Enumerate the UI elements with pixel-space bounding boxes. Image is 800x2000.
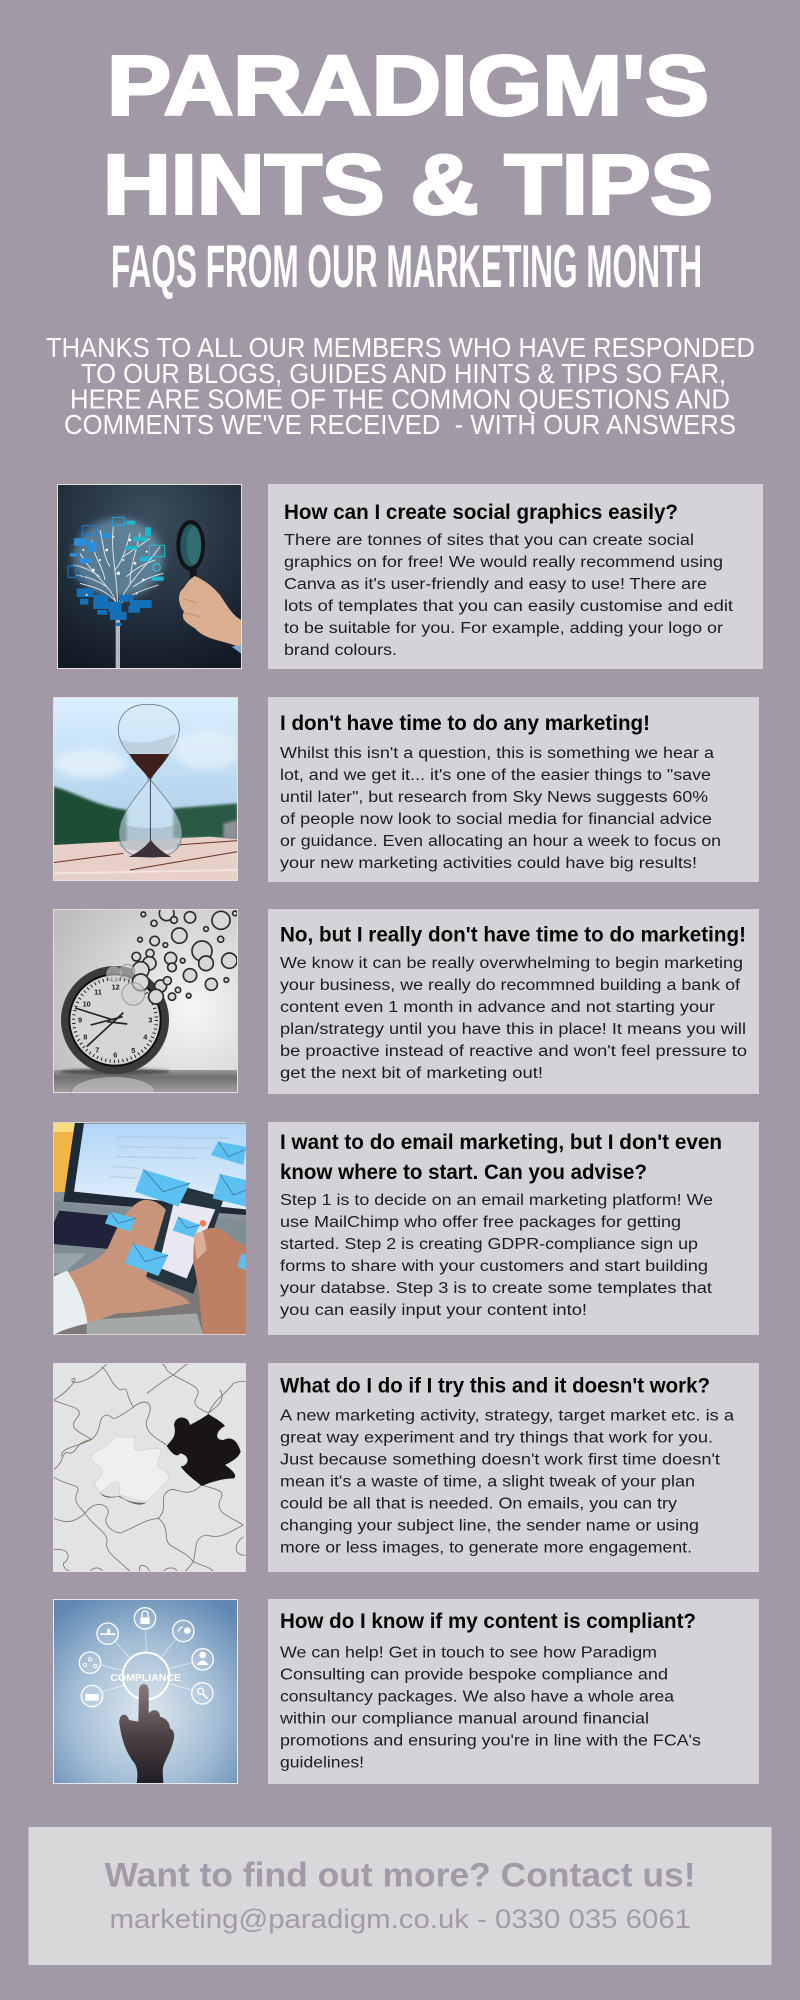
intro text: COMMENTS WE'VE RECEIVED - WITH OUR ANSWERS [64,409,736,440]
answer text: A new marketing activity, strategy, target market etc. is a [280,1408,734,1424]
answer text: until later", but research from Sky News suggests 60% [280,789,708,806]
answer text [280,1192,713,1319]
heading: What do I do if I try this and it doesn't work? [280,1374,710,1398]
heading [280,1131,722,1184]
panel: I don't have time to do any marketing! [268,697,759,882]
image: clock dissolving into small clocks: 5 [131,1046,135,1055]
panel: How can I create social graphics easily? [268,484,763,669]
answer text: brand colours. [284,642,397,659]
image: hand pointing at compliance diagram [53,1599,238,1784]
image: tree of data icons and magnifying glass [57,484,242,669]
image: hourglass [53,697,240,882]
answer text: be proactive instead of reactive and won't feel pressure to [280,1043,747,1060]
image: clock dissolving into small clocks: 4 [143,1033,148,1042]
intro text: HERE ARE SOME OF THE COMMON QUESTIONS AND [70,384,730,414]
image: clock dissolving into small clocks: 6 [113,1051,117,1060]
panel: I want to do email marketing, but I don't even know where to start [268,1122,759,1335]
answer text: We can help! Get in touch to see how Paradigm [280,1644,657,1662]
panel: How do I know if my content is compliant? [268,1599,759,1784]
image: clock dissolving into small clocks: 10 [83,999,91,1008]
answer text: more or less images, to generate more engagement. [280,1540,692,1556]
answer text: or guidance. Even allocating an hour a week to focus on [280,833,721,850]
answer text: get the next bit of marketing out! [280,1065,543,1082]
answer text: lots of templates that you can easily customise and edit [284,598,734,615]
answer text: to be suitable for you. For example, adding your logo or [284,620,723,637]
heading: know where to start. Can you advise? [280,1161,647,1184]
panel: No, but I really don't have time to do marketing! [268,909,759,1094]
image: clock dissolving into small clocks: 3 [148,1016,152,1025]
magnifying glass [190,568,197,580]
answer text: There are tonnes of sites that you can create social [284,532,694,549]
heading: I want to do email marketing, but I don't even [280,1131,722,1154]
title: Paradigm's Hints & Tips: PARADIGM'S [107,38,709,132]
answer text: consultancy packages. We also have a whole area [280,1688,674,1706]
answer text: changing your subject line, the sender name or using [280,1518,699,1534]
intro text [46,332,755,440]
intro text: THANKS TO ALL OUR MEMBERS WHO HAVE RESPONDED [46,332,755,363]
image: clock dissolving into small clocks: 8 [83,1033,87,1042]
image: laptop and phone with email envelopes [53,1122,246,1335]
answer text: of people now look to social media for financial advice [280,811,712,828]
title: Paradigm's Hints & Tips: HINTS & TIPS [103,138,713,232]
answer text: Consulting can provide bespoke compliance and [280,1666,668,1684]
answer text: lot, and we get it... it's one of the easier things to "save [280,767,711,784]
answer text: plan/strategy until you have this in place! It means you will [280,1021,746,1038]
heading: I don't have time to do any marketing! [280,712,650,735]
heading: How do I know if my content is compliant? [280,1610,696,1633]
answer text: promotions and ensuring you're in line with the FCA's [280,1732,701,1750]
intro text: TO OUR BLOGS, GUIDES AND HINTS & TIPS SO FAR, [81,358,726,389]
answer text: you can easily input your content into! [280,1302,587,1319]
contact heading: Want to find out more? Contact us! [104,1856,696,1894]
answer text: great way experiment and try things that work for you. [280,1430,713,1446]
answer text: your databse. Step 3 is to create some templates that [280,1280,713,1297]
answer text: guidelines! [280,1754,364,1772]
image: clock dissolving into small clocks: 9 [78,1016,82,1025]
image: clock dissolving into small clocks: 12 [112,982,120,991]
contact details: marketing@paradigm.co.uk - 0330 035 6061 [110,1904,691,1934]
panel: What do I do if I try this and it doesn't work? [268,1363,759,1572]
answer text: Step 1 is to decide on an email marketing platform! We [280,1192,713,1209]
answer text: We know it can be really overwhelming to begin marketing [280,955,743,972]
panel: contact footer [28,1827,772,1965]
answer text: started. Step 2 is creating GDPR-compliance sign up [280,1236,698,1253]
answer text: your business, we really do recommned building a bank of [280,977,741,994]
answer text: within our compliance manual around financial [279,1710,649,1728]
answer text: Whilst this isn't a question, this is something we hear a [280,745,714,762]
answer text [280,955,747,1082]
answer text: your new marketing activities could have big results! [280,855,697,872]
image: clock dissolving into small clocks: 11 [94,987,102,996]
answer text: Canva as it's user-friendly and easy to use! There are [284,576,707,593]
answer text [280,1408,734,1556]
heading: No, but I really don't have time to do marketing! [280,924,746,946]
answer text [279,1644,701,1772]
image: clock dissolving into small clocks: 7 [95,1046,99,1055]
answer text: could be all that is needed. On emails, you can try [280,1496,677,1512]
title: Paradigm's Hints & Tips [103,38,713,232]
answer text: forms to share with your customers and start building [280,1258,708,1275]
heading: How can I create social graphics easily? [284,501,678,524]
answer text: graphics on for free! We would really recommend using [284,554,723,571]
image: clock dissolving into small clocks [53,906,238,1107]
answer text [284,532,734,659]
label: COMPLIANCE: COMPLIANCE [110,1673,182,1684]
answer text [280,745,721,872]
answer text: use MailChimp who offer free packages for getting [280,1214,681,1231]
answer text: content even 1 month in advance and not starting your [280,999,715,1016]
answer text: Just because something doesn't work first time doesn't [280,1452,721,1468]
image: jigsaw puzzle with missing piece [53,1363,246,1572]
answer text: mean it's a waste of time, a slight tweak of your plan [280,1474,695,1490]
